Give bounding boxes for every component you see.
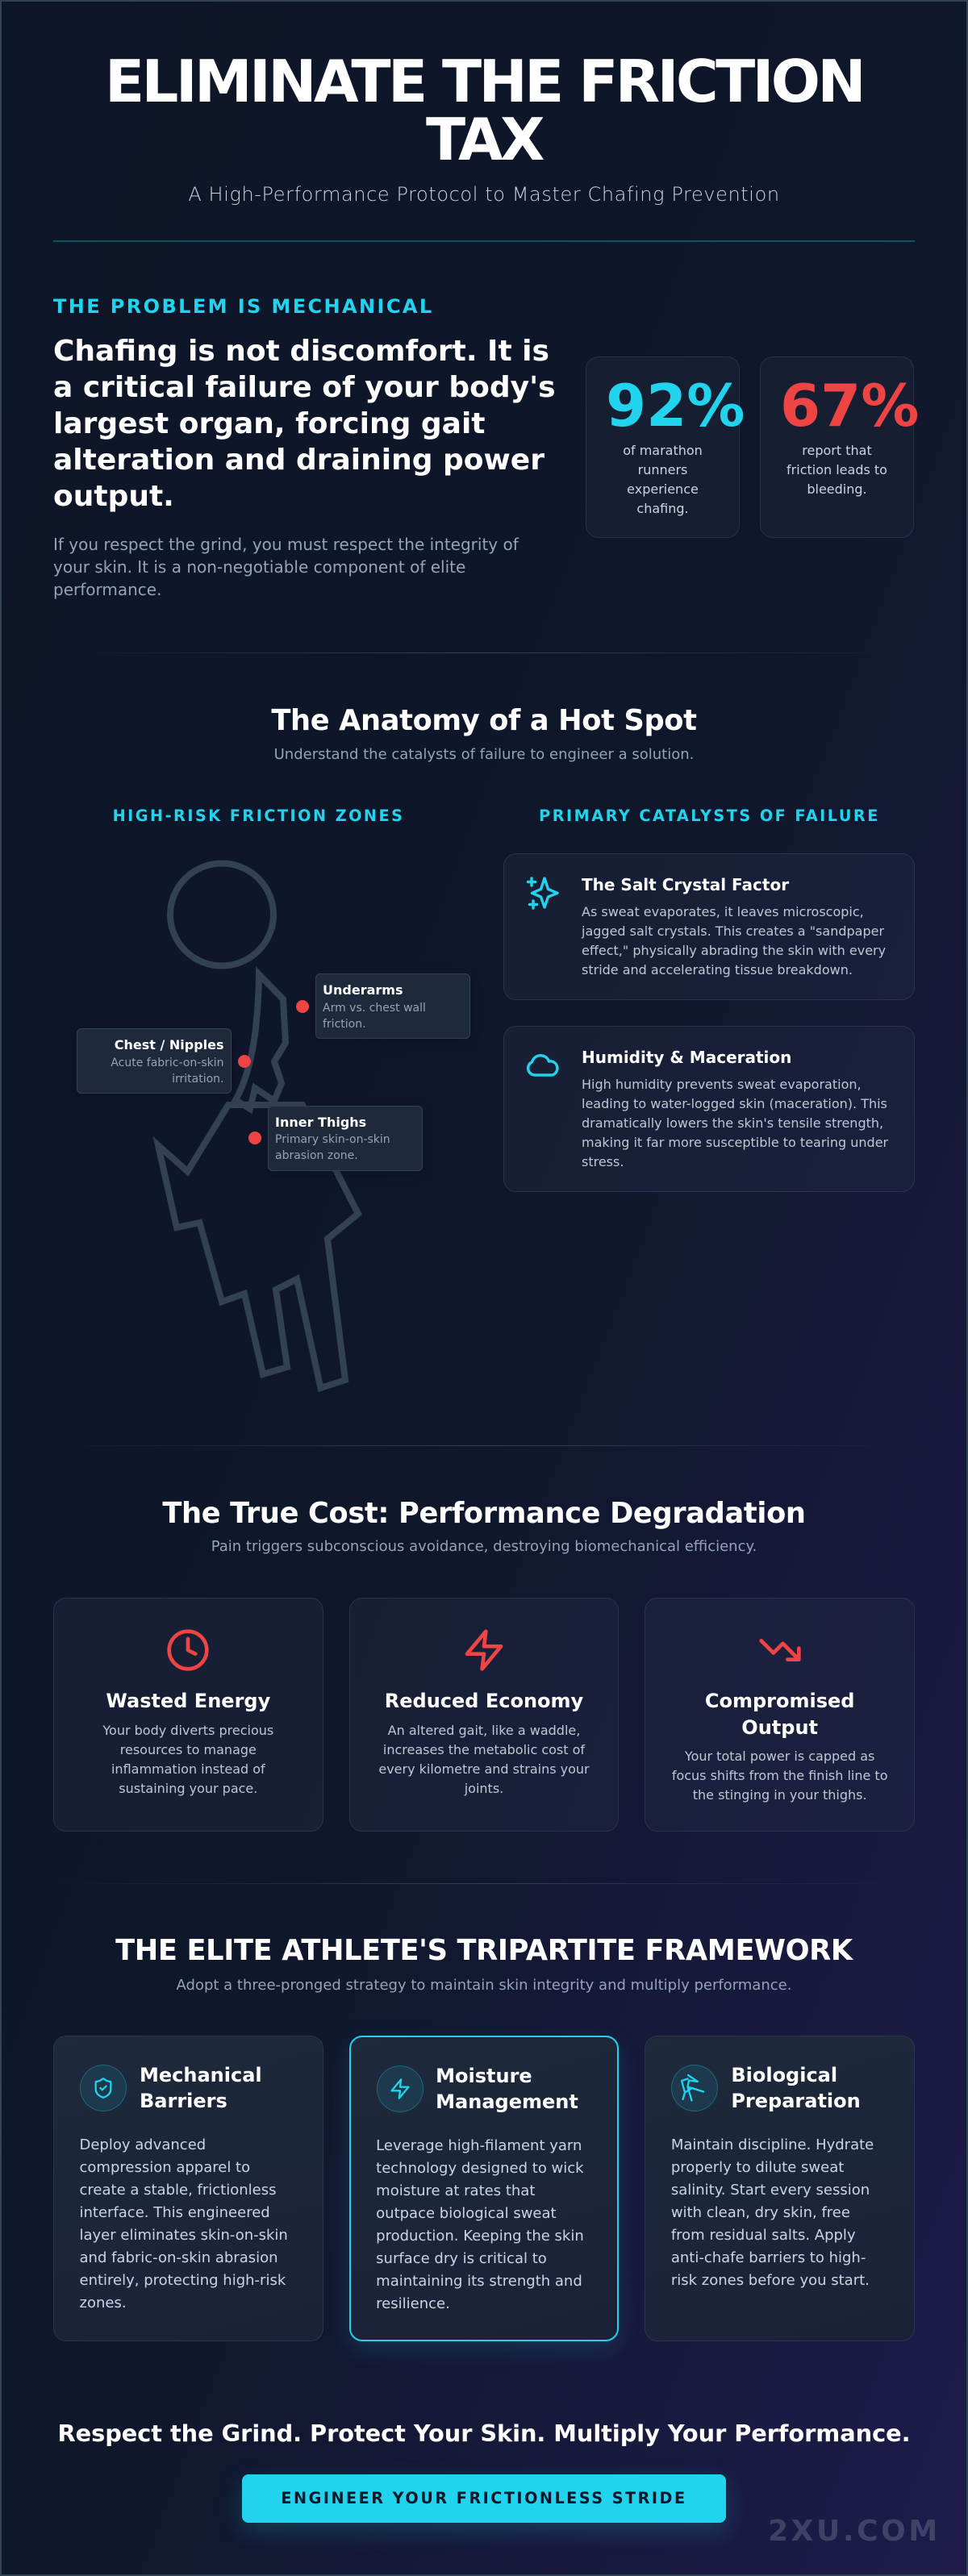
- stat caption: [786, 443, 887, 497]
- icon: sparkles: [526, 877, 559, 910]
- callout: chest: irritation.: [172, 1073, 224, 1086]
- callout: inner thighs: abrasion zone.: [275, 1149, 358, 1162]
- card text: [582, 1077, 889, 1169]
- card title: Reduced Economy: [385, 1690, 583, 1712]
- card text: zones.: [79, 2295, 127, 2311]
- stat caption: chafing.: [636, 501, 689, 516]
- stat number: 92%: [606, 372, 745, 440]
- card title: [705, 1690, 854, 1739]
- stat caption: runners: [638, 462, 687, 477]
- callout: chest: [77, 1028, 231, 1094]
- card text: stress.: [582, 1154, 624, 1169]
- card text: leading to water-logged skin (maceration). This: [582, 1096, 887, 1111]
- stat caption: experience: [627, 481, 699, 497]
- hot spot: underarms: [296, 1000, 309, 1013]
- icon: clock: [167, 1629, 209, 1671]
- card text: risk zones before you start.: [671, 2272, 870, 2289]
- card title: Management: [436, 2090, 578, 2113]
- closing call to action: [58, 2420, 910, 2539]
- card text: making it far more susceptible to tearing under: [582, 1135, 888, 1150]
- card title: [140, 2063, 262, 2112]
- hot spot: chest: [238, 1055, 251, 1068]
- card text: joints.: [465, 1781, 503, 1796]
- card text: the stinging in your thighs.: [693, 1787, 867, 1803]
- body diagram: [77, 860, 470, 1392]
- callout: inner thighs: Inner Thighs: [275, 1115, 366, 1129]
- card text: every kilometre and strains your: [378, 1761, 590, 1777]
- card text: inflammation instead of: [111, 1761, 265, 1777]
- section heading: anatomy: The Anatomy of a Hot Spot: [271, 704, 697, 737]
- card: wasted energy: [53, 1598, 323, 1832]
- card title: Biological: [731, 2063, 837, 2086]
- card text: entirely, protecting high-risk: [79, 2272, 286, 2289]
- icon: shield: [80, 2065, 127, 2111]
- card title: Barriers: [140, 2090, 227, 2112]
- card text: Your body diverts precious: [102, 1723, 273, 1738]
- card: reduced economy: [349, 1598, 619, 1832]
- card text: anti-chafe barriers to high-: [671, 2249, 866, 2266]
- card text: create a stable, frictionless: [79, 2182, 276, 2199]
- stat caption: report that: [802, 443, 872, 458]
- card text: increases the metabolic cost of: [383, 1742, 585, 1757]
- card text: Deploy advanced: [79, 2136, 206, 2153]
- card text: [102, 1723, 273, 1796]
- card text: maintaining its strength and: [376, 2273, 582, 2290]
- card title: Preparation: [731, 2090, 861, 2112]
- panel: the problem: [53, 295, 556, 599]
- card text: Leverage high-filament yarn: [376, 2137, 582, 2154]
- section heading: true cost: The True Cost: Performance Degradation: [162, 1497, 806, 1530]
- card: compromised output: [645, 1598, 915, 1832]
- card text: layer eliminates skin-on-skin: [79, 2227, 288, 2244]
- card text: compression apparel to: [79, 2159, 250, 2176]
- card text: Your total power is capped as: [685, 1749, 874, 1764]
- stat caption: of marathon: [623, 443, 703, 458]
- callout: underarms: Arm vs. chest wall: [323, 1002, 426, 1015]
- stat number: 67%: [780, 372, 919, 440]
- hot spot: thighs: [248, 1132, 261, 1144]
- problem statement: alteration and draining power: [53, 444, 544, 477]
- card text: stride and accelerating tissue breakdown.: [582, 962, 853, 977]
- supporting paragraph: [53, 535, 519, 599]
- callout: underarms: [315, 973, 469, 1039]
- icon: lightning: [377, 2065, 424, 2112]
- card text: technology designed to wick: [376, 2160, 584, 2177]
- card text: sustaining your pace.: [119, 1781, 257, 1796]
- callout: underarms: friction.: [323, 1018, 366, 1031]
- stat caption: [623, 443, 703, 516]
- icon: cloud: [526, 1054, 559, 1077]
- card: humidity: [503, 1026, 915, 1192]
- stat caption: friction leads to: [786, 462, 887, 477]
- card text: resources to manage: [120, 1742, 257, 1757]
- card text: from residual salts. Apply: [671, 2227, 856, 2244]
- stat caption: bleeding.: [807, 481, 867, 497]
- card text: [671, 2136, 874, 2289]
- card: biological preparation: [645, 2036, 915, 2341]
- eyebrow heading: THE PROBLEM IS MECHANICAL: [53, 295, 434, 318]
- problem statement: Chafing is not discomfort. It is: [53, 335, 549, 368]
- callout: inner thighs: [268, 1105, 423, 1171]
- card text: properly to dilute sweat: [671, 2159, 844, 2176]
- callout: inner thighs: Primary skin-on-skin: [275, 1133, 390, 1146]
- card title: Wasted Energy: [106, 1690, 270, 1712]
- card text: focus shifts from the finish line to: [672, 1768, 887, 1783]
- section subheading: anatomy: Understand the catalysts of failure to engineer a solution.: [274, 746, 694, 763]
- section subheading: framework: Adopt a three-pronged strategy to maintain skin integrity and multiply performance.: [177, 1977, 791, 1994]
- card text: and fabric-on-skin abrasion: [79, 2249, 278, 2266]
- stat card: 92%: [586, 356, 740, 538]
- problem statement: output.: [53, 480, 174, 513]
- watermark: 2XU.COM: [768, 2515, 941, 2548]
- title: TAX: [426, 106, 542, 173]
- icon: trending down: [759, 1639, 801, 1661]
- card text: As sweat evaporates, it leaves microscopic,: [582, 904, 864, 919]
- card title: Compromised: [705, 1690, 854, 1712]
- problem statement: [53, 335, 556, 513]
- problem statement: largest organ, forcing gait: [53, 407, 486, 440]
- subtitle: A High-Performance Protocol to Master Chafing Prevention: [188, 183, 780, 206]
- column heading: catalysts: PRIMARY CATALYSTS OF FAILURE: [539, 807, 880, 825]
- supporting paragraph: performance.: [53, 580, 161, 599]
- CTA button: [242, 2474, 726, 2523]
- section heading: framework: THE ELITE ATHLETE'S TRIPARTITE FRAMEWORK: [115, 1934, 853, 1967]
- card text: dramatically lowers the skin's tensile strength,: [582, 1115, 883, 1131]
- section subheading: true cost: Pain triggers subconscious avoidance, destroying biomechanical efficiency.: [211, 1538, 757, 1555]
- card text: [378, 1723, 590, 1796]
- card text: production. Keeping the skin: [376, 2228, 584, 2245]
- card text: moisture at rates that: [376, 2182, 535, 2199]
- card title: Moisture: [436, 2065, 532, 2087]
- card text: surface dry is critical to: [376, 2250, 547, 2267]
- card text: [79, 2136, 288, 2311]
- card title: Output: [741, 1716, 818, 1739]
- title: ELIMINATE THE FRICTION: [105, 48, 863, 115]
- card text: High humidity prevents sweat evaporation,: [582, 1077, 862, 1092]
- title: [105, 48, 863, 173]
- card text: interface. This engineered: [79, 2204, 270, 2221]
- problem statement: a critical failure of your body's: [53, 371, 556, 404]
- card text: [672, 1749, 887, 1803]
- column heading: friction zones: HIGH-RISK FRICTION ZONES: [113, 807, 404, 825]
- stat card: 67%: [760, 356, 914, 538]
- card: moisture management: [349, 2036, 619, 2341]
- card title: The Salt Crystal Factor: [582, 875, 789, 894]
- card title: [436, 2065, 578, 2113]
- card text: salinity. Start every session: [671, 2182, 870, 2199]
- CTA button: ENGINEER YOUR FRICTIONLESS STRIDE: [281, 2489, 687, 2507]
- callout: chest: Chest / Nipples: [115, 1037, 224, 1052]
- card text: jagged salt crystals. This creates a "sandpaper: [582, 923, 884, 939]
- card: mechanical barriers: [53, 2036, 323, 2341]
- card text: Maintain discipline. Hydrate: [671, 2136, 874, 2153]
- icon: bio glyph: [671, 2065, 718, 2111]
- closing statement: Respect the Grind. Protect Your Skin. Multiply Your Performance.: [58, 2420, 910, 2447]
- card title: [731, 2063, 861, 2112]
- card text: An altered gait, like a waddle,: [388, 1723, 580, 1738]
- card title: Mechanical: [140, 2063, 262, 2086]
- callout: chest: Acute fabric-on-skin: [111, 1057, 224, 1069]
- card text: [376, 2137, 584, 2312]
- header: [53, 48, 915, 242]
- card text: resilience.: [376, 2295, 450, 2312]
- icon: lightning: [465, 1629, 503, 1671]
- card text: outpace biological sweat: [376, 2205, 557, 2222]
- supporting paragraph: your skin. It is a non-negotiable component of elite: [53, 557, 465, 577]
- card title: Humidity & Maceration: [582, 1048, 791, 1067]
- card: salt crystal: [503, 853, 915, 1000]
- card text: with clean, dry skin, free: [671, 2204, 850, 2221]
- supporting paragraph: If you respect the grind, you must respect the integrity of: [53, 535, 519, 554]
- runner silhouette: [153, 860, 362, 1392]
- card text: effect," physically abrading the skin with every: [582, 943, 886, 958]
- card text: [581, 904, 886, 977]
- callout: underarms: Underarms: [323, 982, 403, 998]
- header rule: [53, 240, 915, 242]
